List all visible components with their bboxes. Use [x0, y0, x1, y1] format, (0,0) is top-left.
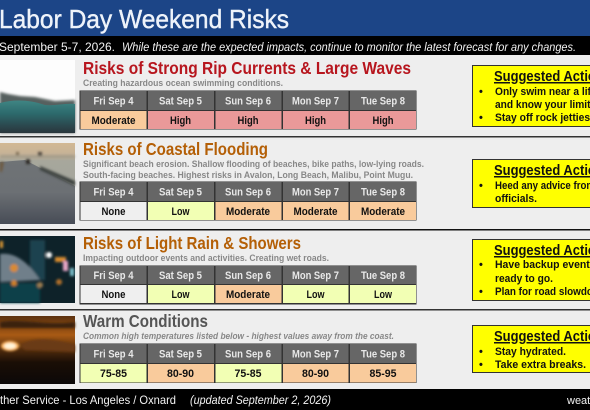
photo: breaking wave [0, 60, 75, 133]
suggested actions box: • [479, 259, 483, 271]
photo: flooded coast road [0, 143, 75, 224]
temperature table: Sun Sep 6 [225, 348, 271, 360]
heading: Risks of Coastal Flooding [83, 139, 268, 159]
divider [0, 136, 590, 138]
subtitle bar [0, 36, 590, 55]
suggested actions box: ready to go. [495, 273, 553, 285]
risk table: Sun Sep 6 [225, 96, 271, 108]
photo: orange sunset [0, 316, 75, 384]
risk table: Fri Sep 4 [94, 270, 134, 282]
risk table: High [372, 115, 394, 127]
panel: coastal flooding: South-facing beaches. Highest risks in Avalon, Long Beach, Malibu, Point Mugu. [83, 170, 413, 181]
risk table: Low [374, 289, 392, 301]
subtitle bar: September 5-7, 2026. [0, 40, 115, 54]
heading: Warm Conditions [83, 311, 208, 331]
risk table: Mon Sep 7 [292, 186, 339, 198]
risk table: Sat Sep 5 [159, 186, 202, 198]
heading: Risks of Light Rain & Showers [83, 233, 301, 253]
suggested actions box: Stay hydrated. [495, 346, 566, 358]
risk table: Moderate [92, 115, 136, 127]
suggested actions box [472, 66, 590, 126]
temperature table [80, 344, 416, 383]
temperature table: 85-95 [370, 368, 396, 380]
risk table: Mon Sep 7 [292, 270, 339, 282]
risk table: Fri Sep 4 [94, 186, 134, 198]
risk table: Sun Sep 6 [225, 186, 271, 198]
risk table [80, 90, 416, 130]
risk table: Sat Sep 5 [159, 270, 202, 282]
suggested actions box: • [479, 359, 483, 371]
footer bar [0, 389, 590, 410]
subtitle bar: While these are the expected impacts, continue to monitor the latest forecast for any changes. [122, 42, 576, 54]
suggested actions box [472, 160, 590, 208]
risk table: None [102, 289, 126, 301]
suggested actions box: • [479, 180, 483, 192]
header banner [0, 0, 590, 36]
description: Significant beach erosion. Shallow flooding of beaches, bike paths, low-lying roads. [83, 159, 424, 170]
divider [0, 309, 590, 310]
temperature table: Tue Sep 8 [361, 348, 405, 360]
suggested actions box [472, 326, 590, 372]
risk table: Fri Sep 4 [94, 96, 134, 108]
description: Creating hazardous ocean swimming conditions. [83, 78, 283, 89]
risk table: Moderate [226, 206, 270, 218]
risk table: Tue Sep 8 [361, 186, 405, 198]
temperature table: 75-85 [100, 368, 127, 380]
risk table: High [170, 115, 191, 127]
temperature table: Mon Sep 7 [292, 348, 339, 360]
suggested actions box: • [479, 286, 483, 298]
risk table [80, 266, 416, 304]
risk table: Tue Sep 8 [361, 96, 405, 108]
footer bar: ther Service - Los Angeles / Oxnard [0, 393, 176, 407]
photo: umbrella in rain with bokeh [0, 236, 75, 303]
temperature table: 80-90 [302, 368, 329, 380]
risk table: Low [306, 289, 325, 301]
risk table: Low [172, 206, 190, 218]
suggested actions box: Take extra breaks. [495, 359, 586, 371]
heading: Risks of Strong Rip Currents & Large Waves [83, 58, 411, 78]
risk table: High [305, 115, 326, 127]
risk table: Sun Sep 6 [225, 270, 271, 282]
temperature table: Fri Sep 4 [94, 348, 134, 360]
description: Impacting outdoor events and activities. Creating wet roads. [83, 253, 329, 264]
suggested actions box [472, 240, 590, 300]
risk table: Sat Sep 5 [159, 96, 202, 108]
risk table: None [102, 206, 126, 218]
description: Common high temperatures listed below - highest values away from the coast. [83, 331, 394, 342]
panel: warm conditions [0, 311, 590, 384]
temperature table: Sat Sep 5 [159, 348, 202, 360]
risk table: Low [172, 289, 190, 301]
risk table [80, 182, 416, 220]
suggested actions box: • [479, 112, 483, 124]
risk table: High [238, 115, 259, 127]
risk table: Moderate [226, 289, 270, 301]
panel: coastal flooding [0, 139, 590, 224]
risk table: Moderate [294, 206, 338, 218]
risk table: Moderate [361, 206, 405, 218]
divider [0, 229, 590, 230]
panel: rain [0, 233, 590, 304]
risk table: Mon Sep 7 [292, 96, 339, 108]
panel: rip currents [0, 58, 590, 133]
title: Labor Day Weekend Risks [0, 4, 289, 34]
suggested actions box: officials. [495, 193, 537, 205]
suggested actions box: • [479, 346, 483, 358]
footer bar: (updated September 2, 2026) [190, 393, 331, 407]
temperature table: 75-85 [234, 368, 262, 380]
temperature table: 80-90 [167, 368, 194, 380]
suggested actions box: • [479, 86, 483, 98]
risk table: Tue Sep 8 [361, 270, 405, 282]
